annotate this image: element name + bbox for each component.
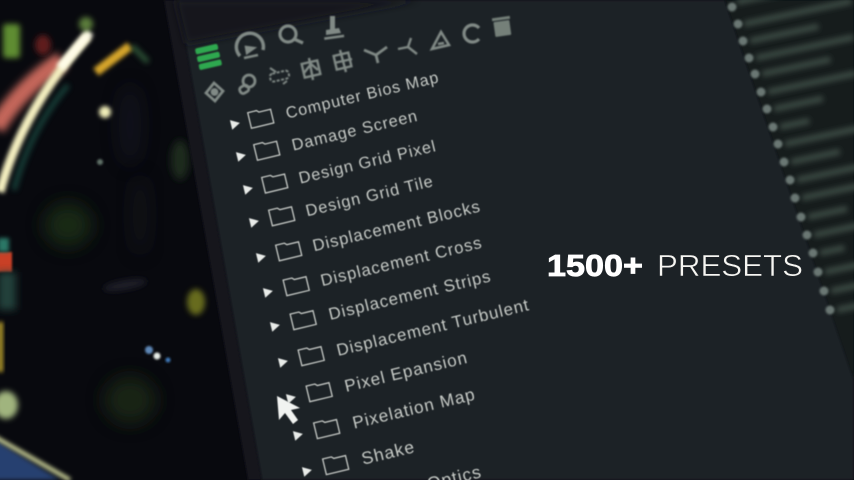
row: Displacement Turbulent [277,295,531,374]
row: Displacement Cross: Displacement Cross [319,233,484,290]
row: Design Grid Pixel [242,136,438,201]
icon: link ring [239,75,255,95]
toolbar icons [195,16,512,101]
row: Displacement Blocks: Displacement Blocks [311,197,483,255]
row: Computer Bios Map [229,67,441,136]
side list rows [736,0,854,313]
panel: blurred side list [725,0,854,380]
row: Pixelation Map: Pixelation Map [350,384,477,433]
icon: mirror box [302,58,320,80]
icon: mouse cursor [277,396,300,424]
icon: letter A [432,32,449,49]
row: Design Grid Tile [248,171,435,234]
row: Displacement Turbulent: Displacement Turbulent [335,295,531,360]
row: Damage Screen: Damage Screen [290,107,420,155]
icon: refresh [464,25,479,42]
row: Damage Screen [235,106,420,168]
row: Computer Bios Map: Computer Bios Map [284,68,441,123]
row: Displacement Strips [269,266,493,338]
row: Pixelation Map [292,384,477,447]
icon: stamp [324,16,344,40]
icon: crop box [334,50,352,72]
preset list [229,67,531,480]
row: Shake [301,436,417,480]
icon: green layers [195,44,222,70]
icon: fork [364,47,387,63]
headline: 1500+ PRESETS: PRESETS [657,248,803,283]
panel: dark preset window [178,0,854,480]
row: Displacement Cross [262,233,484,304]
row: Pixel Epansion [285,348,470,410]
icon: gauge [236,33,263,58]
icon: nodes [398,38,417,54]
side list bullets [728,2,834,314]
headline: 1500+ PRESETS: 1500+ [547,248,643,283]
row: Displacement Blocks [255,197,483,269]
row: Design Grid Tile: Design Grid Tile [304,172,435,220]
row: Shake: Shake [359,436,417,469]
row: Displacement Strips: Displacement Strips [327,266,493,324]
headline: 1500+ PRESETS [547,248,803,283]
icon: target [206,83,223,101]
icon: trash [492,16,512,37]
row: Pixel Epansion: Pixel Epansion [343,348,470,396]
icon: search [280,26,303,43]
icon: keys [269,68,290,84]
panel top shadow [175,0,420,44]
row: Design Grid Pixel: Design Grid Pixel [297,137,438,188]
monitor bezel [164,0,262,480]
